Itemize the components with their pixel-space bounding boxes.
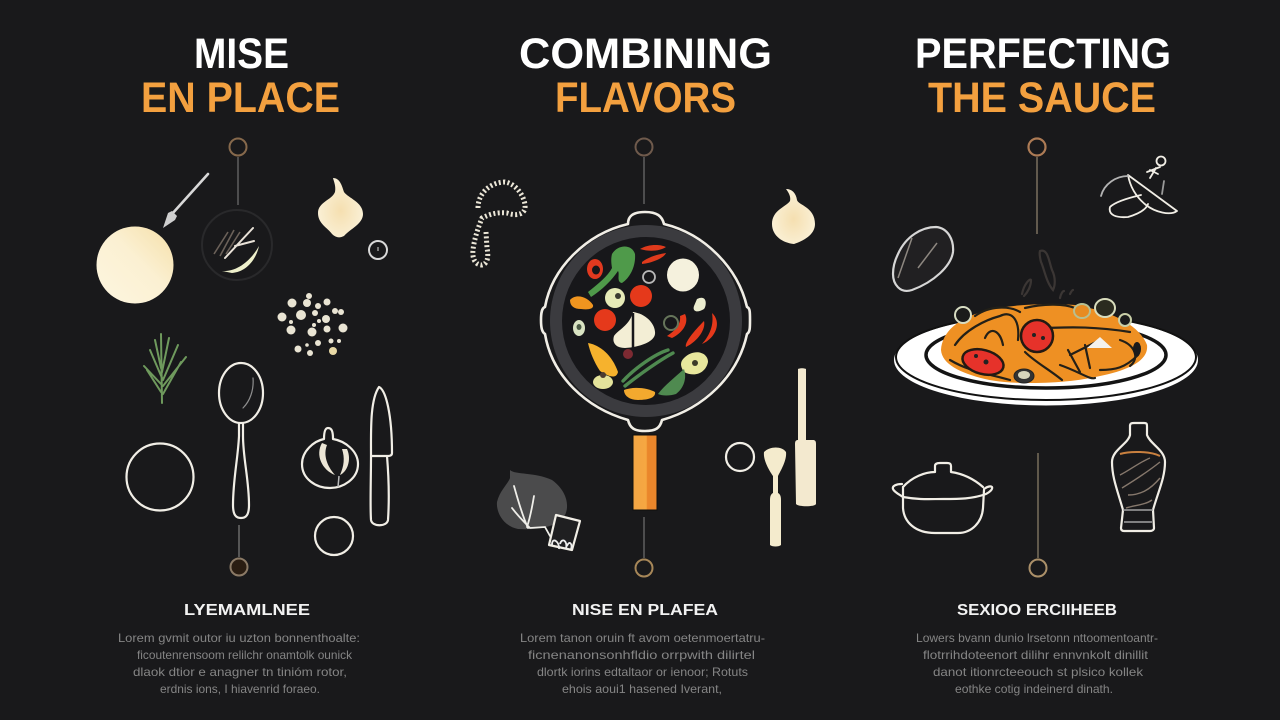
panel: combining flavors [473,30,816,696]
heading: mise en place: EN PLACE [141,74,340,122]
icon: sauce bottle [1112,423,1165,531]
body text: ficnenanonsonhfldio orrpwith dilirtel [528,648,755,662]
body text: flotrrihdoteenort dilihr ennvnkolt dinillit [923,648,1149,662]
icon: skewer knife [163,174,208,228]
heading: perfecting the sauce [915,30,1171,122]
body text: dlortk iorins edtaltaor or ienoor; Rotuts [537,665,748,679]
mussel pieces [1014,369,1034,383]
pan body [550,225,742,417]
bottom connector [230,525,248,576]
white wedge [1087,337,1112,348]
icon: plated pasta [894,299,1198,406]
icon: rosemary sprig [144,334,186,403]
heading: perfecting the sauce: PERFECTING [915,30,1171,78]
body text: danot itionrcteeouch st plsico kollek [933,665,1144,679]
panel: mise en place [96,30,392,696]
body text [520,631,765,696]
bottom connector [1030,453,1046,576]
bottom connector [636,517,652,576]
pasta [941,304,1147,383]
icon: dark leaf with bag [497,470,580,550]
heading: perfecting the sauce: THE SAUCE [928,74,1156,122]
body text: ehois aoui1 hasened Iverant, [562,682,722,696]
icon: garlic bulb [772,189,815,244]
body text [916,631,1158,696]
icon: spoon outline [219,363,263,518]
icon: cream disc [96,226,174,304]
body text: eothke cotig indeinerd dinath. [955,682,1113,696]
body text: Lorem tanon oruin ft avom oetenmoertatru- [520,631,765,645]
heading: combining flavors: FLAVORS [555,74,736,122]
body text: Lorem gvmit outor iu uzton bonnenthoalte: [118,631,360,645]
icon: garlic outline [302,428,358,488]
icon: mini spoon [764,448,786,546]
icon: mussel shell [893,227,953,291]
icon: large ring [126,444,194,510]
icon: sketched utensil [1101,156,1177,217]
icon: steam [1022,251,1073,298]
body text: dlaok dtior e anagner tn tinióm rotor, [133,665,347,679]
pan handle [633,435,657,510]
plate [894,314,1198,406]
icon: table knife [371,387,392,525]
subheading: SEXIOO ERCIIHEEB [957,602,1117,619]
subheading: LYEMAMLNEE [184,602,310,619]
subheading: NISE EN PLAFEA [572,602,718,619]
top connector [636,138,652,204]
body text: ficoutenrensoom relilchr onamtolk ounick [137,648,353,662]
pan outline [541,212,750,431]
icon: cream spatula [795,368,816,506]
icon: beaded rope [473,182,525,265]
icon: cooking pot [893,463,992,533]
icon: herbs in dark bowl [202,210,272,280]
top connector [1028,138,1046,234]
icon: frying pan [541,212,750,510]
icon: garlic bulb [318,178,363,237]
top connector [230,138,246,205]
panel: perfecting the sauce [893,30,1198,696]
icon: peppercorn cluster [278,293,348,356]
icon: small ring [369,241,387,259]
heading: mise en place: MISE [194,30,289,78]
icon: small ring lower [315,517,353,555]
tomato slices [1021,320,1053,352]
body text: Lowers bvann dunio lrsetonn nttoomentoantr- [916,631,1158,645]
heading: combining flavors [519,30,772,122]
heading: mise en place [141,30,340,122]
icon: small ring [726,443,754,471]
ingredients [570,245,717,400]
body text [118,631,360,696]
heading: combining flavors: COMBINING [519,30,772,78]
body text: erdnis ions, I hiavenrid foraeo. [160,682,320,696]
